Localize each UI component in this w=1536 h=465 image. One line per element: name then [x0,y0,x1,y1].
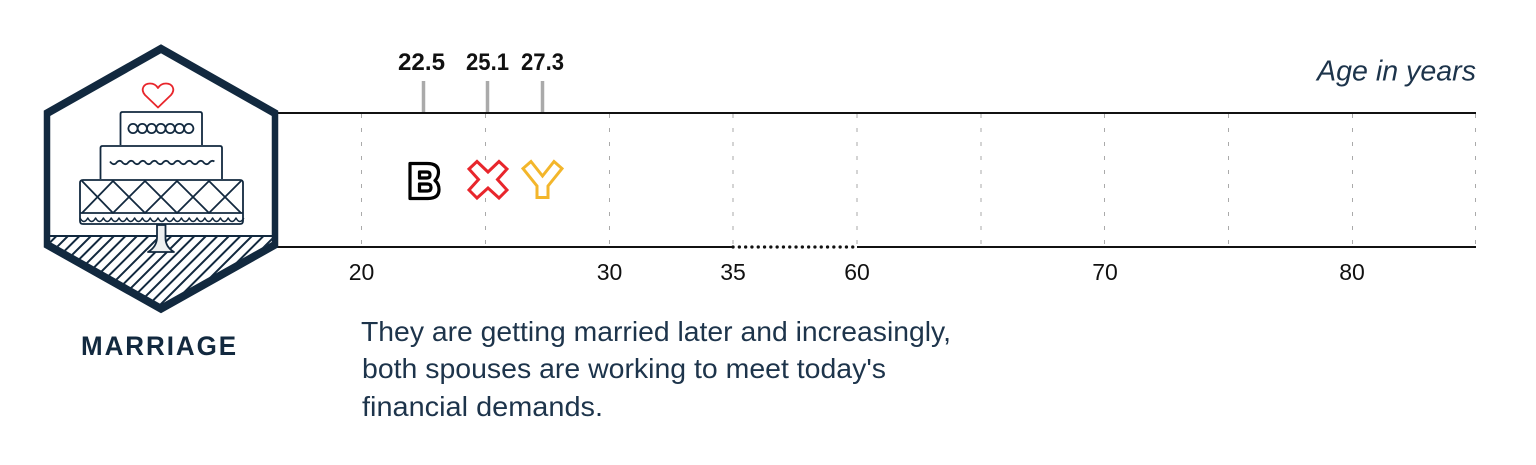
icon: letter Y [523,162,562,198]
marker: generation X 25.1: 25.1 [466,49,509,76]
top tier [120,112,202,145]
hatched floor [50,237,272,304]
timeline chart [276,113,1476,285]
axis labels: 70 [1092,259,1118,285]
marker: boomers 22.5: 22.5 [398,49,445,76]
axis labels: 20 [349,259,374,285]
marker: generation X 25.1 [466,49,509,198]
description text: financial demands. [362,391,603,422]
floor line [48,235,274,237]
axis title: Age in years [1315,56,1476,88]
icon: heart [143,84,173,108]
axis labels [349,259,1365,285]
cake stand [148,225,174,252]
hexagon outline [47,48,275,310]
marker: generation Y 27.3: 27.3 [521,49,564,76]
bottom tier [80,180,244,224]
description text: They are getting married later and increasingly, [361,316,951,347]
description text [361,316,951,422]
description text: both spouses are working to meet today's [362,353,886,384]
badge label: MARRIAGE [81,331,238,361]
marker: generation Y 27.3 [521,49,564,198]
icon: wedding cake [80,112,244,252]
axis labels: 80 [1339,259,1365,285]
top axis line [276,112,1476,114]
icon: letter X [469,162,507,198]
axis labels: 30 [597,259,622,285]
axis labels: 35 [720,259,746,285]
icon: letter B [410,164,439,198]
axis labels: 60 [844,259,870,285]
bottom axis line [276,246,1476,248]
thicker diagonal edges [47,49,275,308]
middle tier [100,146,222,179]
hexagon badge: marriage [44,44,278,314]
dotted axis break between 35 and 60 [733,245,857,249]
marker: boomers 22.5 [398,49,445,198]
